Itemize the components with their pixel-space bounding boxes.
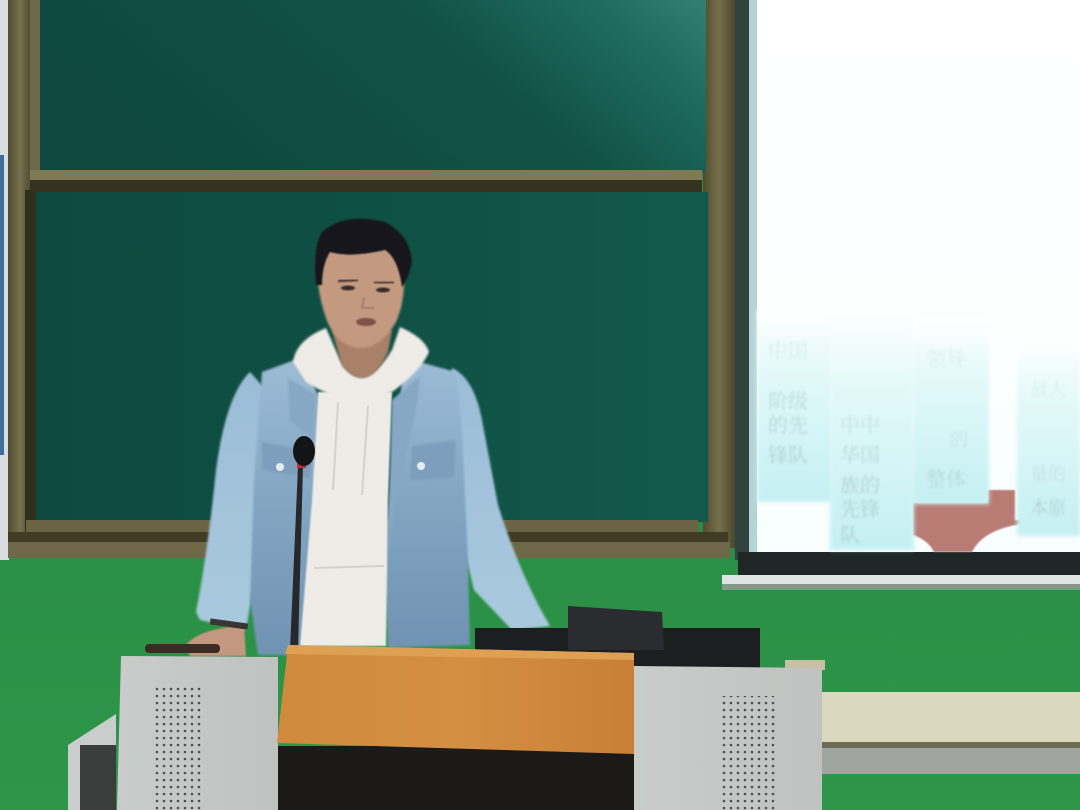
speaker — [186, 219, 550, 656]
face — [316, 240, 404, 348]
far left side panel — [68, 714, 116, 810]
middle rail — [30, 170, 702, 192]
left speaker grille — [154, 684, 204, 810]
hoodie pocket line and strings — [314, 402, 384, 568]
eyes and brows — [338, 280, 394, 283]
jacket left side — [250, 358, 318, 655]
wrist and hand — [186, 626, 246, 656]
mouth — [356, 318, 376, 326]
green wall — [0, 545, 1080, 810]
lectern — [68, 645, 822, 810]
slide card: column 3: 的 — [950, 430, 968, 450]
chalk tray — [8, 520, 730, 558]
left grey panel — [117, 656, 278, 810]
projection screen housing — [722, 0, 1080, 590]
projection screen — [757, 0, 1080, 552]
slide card: column 2: 队 — [840, 524, 860, 547]
blackboard frame — [0, 0, 735, 560]
right table — [785, 660, 1080, 774]
hair — [315, 219, 412, 287]
slide card: column 1 — [757, 310, 832, 502]
right speaker grille — [722, 696, 778, 810]
neck — [332, 330, 392, 378]
slide card: column 2: 族的 — [840, 474, 880, 497]
slide card: column 4 — [1017, 340, 1080, 536]
dark front recess — [278, 746, 634, 810]
slide card: column 2 — [830, 310, 914, 550]
slide card: column 4: 本原 — [1030, 498, 1066, 518]
upper blackboard — [40, 0, 706, 172]
item on lectern — [145, 644, 220, 653]
slide card: column 3: 领导 — [926, 348, 966, 371]
slide card: column 1: 中国 — [768, 340, 808, 363]
slide card: column 3: 整体 — [926, 468, 966, 491]
slide decoration: red shape — [913, 490, 1040, 552]
hood — [293, 327, 429, 402]
wooden top — [277, 645, 634, 754]
hoodie body — [300, 392, 392, 646]
desk monitor — [475, 606, 760, 668]
slide card: column 2: 华国 — [840, 444, 880, 467]
slide card: column 1: 的先 — [768, 414, 808, 437]
slide card: column 1: 锋队 — [768, 444, 808, 467]
slide card: column 2: 中中 — [840, 414, 880, 437]
slide card: column 1: 阶级 — [768, 390, 808, 413]
slide card: column 3 — [913, 320, 989, 504]
jacket right side — [384, 358, 470, 648]
microphone — [290, 436, 315, 650]
right sleeve — [445, 368, 550, 630]
slide card: column 2: 先锋 — [840, 498, 880, 521]
slide card: column 4: 最大 — [1030, 380, 1066, 400]
left sleeve — [196, 372, 275, 630]
lower blackboard — [36, 192, 708, 522]
chest pockets — [262, 440, 456, 480]
right grey panel — [634, 666, 822, 810]
lapels — [288, 376, 420, 560]
nose — [362, 297, 374, 308]
slide card: column 4: 量的 — [1030, 464, 1066, 484]
